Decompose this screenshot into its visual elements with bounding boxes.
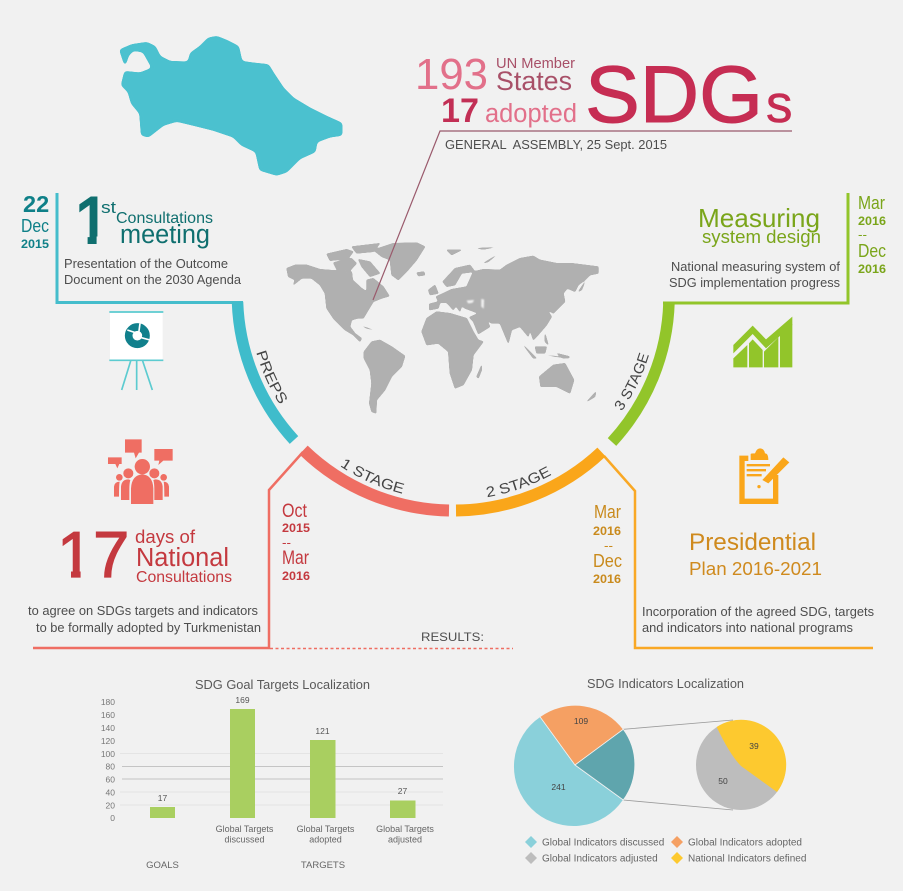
stage 3 date: Mar xyxy=(858,193,885,213)
panel: stage 1 national consultations xyxy=(28,439,450,650)
stage 1 description xyxy=(28,604,261,635)
heading: SDGs adopted: adopted xyxy=(485,100,577,128)
panel: stage 2 presidential plan xyxy=(456,448,874,650)
main pie xyxy=(514,705,635,826)
pie legend: Global Indicators adopted xyxy=(688,838,802,848)
pie value labels: 50 xyxy=(718,776,728,786)
stage 3 connector xyxy=(663,193,848,303)
stage 1 heading: National xyxy=(136,544,229,572)
stage 3 heading xyxy=(698,203,821,247)
stage 2 label: 2 STAGE xyxy=(486,466,552,498)
preps date: 22 xyxy=(23,191,49,217)
y axis labels: 180 xyxy=(101,697,115,707)
pie chart title: SDG Indicators Localization xyxy=(587,677,744,691)
stage 1 date: -- xyxy=(282,535,291,550)
preps heading: meeting xyxy=(120,221,210,249)
y axis labels: 140 xyxy=(101,723,115,733)
stage 1 heading xyxy=(57,518,232,591)
stage 2 date: Dec xyxy=(593,551,622,571)
y axis labels: 40 xyxy=(106,788,115,798)
preps arc xyxy=(238,302,294,440)
y axis labels: 160 xyxy=(101,710,115,720)
text: general assembly date: GENERAL ASSEMBLY, 25 Sept. 2015 xyxy=(445,138,667,152)
stage 1 date xyxy=(282,501,310,583)
pie value labels: 39 xyxy=(749,741,759,751)
stage 1 date: 2015 xyxy=(282,521,310,535)
stage 2 date xyxy=(593,502,622,586)
stage 1 description: to agree on SDGs targets and indicators xyxy=(28,604,258,618)
stage 3 date: 2016 xyxy=(858,214,886,228)
preps description: Presentation of the Outcome xyxy=(64,257,228,271)
bar value labels: 169 xyxy=(235,695,250,705)
bar category labels: Global Targets xyxy=(216,824,274,834)
preps heading: st xyxy=(101,198,116,217)
stage 2 arc xyxy=(456,452,602,510)
preps heading xyxy=(70,183,213,257)
preps connector xyxy=(57,193,243,302)
heading: SDGs adopted: s xyxy=(766,75,792,134)
breakout pie xyxy=(696,720,786,810)
bar category labels: adopted xyxy=(309,834,342,844)
pie value labels: 109 xyxy=(574,716,588,726)
heading: SDGs adopted: SDG xyxy=(585,50,763,140)
stage 3 date: Dec xyxy=(858,241,886,261)
y axis labels: 100 xyxy=(101,749,115,759)
bar category labels: discussed xyxy=(224,834,265,844)
pie legend: National Indicators defined xyxy=(688,854,806,864)
bars xyxy=(150,709,416,818)
bar value labels xyxy=(158,695,407,803)
stage 1 date: 2016 xyxy=(282,569,310,583)
heading: SDGs adopted xyxy=(415,50,792,140)
preps date xyxy=(21,191,49,251)
stage 2 description: and indicators into national programs xyxy=(642,621,853,635)
icon: growth chart xyxy=(733,317,792,367)
preps heading: 1 xyxy=(74,183,111,257)
bar value labels: 17 xyxy=(158,793,167,803)
icon: people talking xyxy=(108,439,173,504)
preps date: Dec xyxy=(21,216,49,236)
stage 1 heading: 17 xyxy=(57,518,129,591)
icon: clipboard and pencil xyxy=(742,448,789,501)
stage 2 description: Incorporation of the agreed SDG, targets xyxy=(642,605,874,619)
stage 1 connector xyxy=(33,452,303,648)
y axis labels: 60 xyxy=(106,774,115,784)
stage 2 description xyxy=(642,605,874,635)
stage 2 heading xyxy=(689,529,822,579)
bar chart title: SDG Goal Targets Localization xyxy=(195,677,370,692)
preps description xyxy=(64,257,241,287)
pie legend: Global Indicators discussed xyxy=(542,838,664,848)
bar value labels: 121 xyxy=(315,726,330,736)
results divider xyxy=(270,648,513,650)
preps heading: Consultations xyxy=(116,210,213,227)
bar category labels xyxy=(216,824,434,844)
stage 2 heading: Presidential xyxy=(689,529,816,556)
stage 3 label: 3 STAGE xyxy=(614,352,649,410)
stage 2 connector xyxy=(604,456,873,648)
stage 3 date: -- xyxy=(858,227,867,242)
stage 3 description: National measuring system of xyxy=(671,260,841,274)
stage 2 date: Mar xyxy=(594,502,621,522)
heading: SDGs adopted: 17 xyxy=(441,92,479,130)
stage 1 label: 1 STAGE xyxy=(340,460,404,494)
pie legend: Global Indicators adjusted xyxy=(542,854,658,864)
stage 1 arc xyxy=(304,450,449,510)
pie value labels xyxy=(551,716,759,792)
stage 2 date: 2016 xyxy=(593,524,621,538)
y axis labels: 120 xyxy=(101,736,115,746)
pie value labels: 241 xyxy=(551,782,566,792)
icon: presentation easel xyxy=(109,312,163,390)
stage 3 heading: Measuring xyxy=(698,203,820,233)
bar chart: SDG goal targets localization xyxy=(101,677,443,871)
stage 3 heading: system design xyxy=(702,226,821,247)
y axis labels: 80 xyxy=(106,762,115,772)
bar category labels: Global Targets xyxy=(376,824,434,834)
heading: SDGs adopted: 193 xyxy=(415,50,488,99)
stage 2 date: 2016 xyxy=(593,572,621,586)
stage 2 date: -- xyxy=(604,538,613,553)
stage 2 heading: Plan 2016-2021 xyxy=(689,558,822,579)
heading: SDGs adopted: UN Member xyxy=(496,56,575,72)
panel: preps xyxy=(21,183,298,444)
stage 1 heading: days of xyxy=(135,526,196,547)
stage 1 date: Mar xyxy=(282,548,310,569)
map: Turkmenistan xyxy=(120,37,342,175)
stage 3 arc xyxy=(612,302,669,442)
preps date: 2015 xyxy=(21,237,49,251)
stage 3 date: 2016 xyxy=(858,262,886,276)
pie legend xyxy=(525,836,806,864)
panel: stage 3 measuring xyxy=(608,193,886,446)
stage 3 description: SDG implementation progress xyxy=(669,276,840,290)
bar group labels: TARGETS xyxy=(301,860,345,871)
pie chart: SDG indicators localization xyxy=(514,677,806,864)
bar group labels xyxy=(146,860,345,871)
bar value labels: 27 xyxy=(398,786,407,796)
preps description: Document on the 2030 Agenda xyxy=(64,273,241,287)
y axis labels xyxy=(101,697,115,823)
heading: SDGs adopted: States xyxy=(496,66,572,96)
connector: general assembly line xyxy=(373,131,792,300)
y axis labels: 20 xyxy=(106,800,115,810)
bar category labels: adjusted xyxy=(388,834,422,844)
y axis labels: 0 xyxy=(110,813,115,823)
bar category labels: Global Targets xyxy=(297,824,355,834)
preps label: PREPS xyxy=(256,350,287,404)
stage 1 heading: Consultations xyxy=(136,569,232,586)
stage 3 description xyxy=(669,260,841,290)
stage 1 date: Oct xyxy=(282,501,308,522)
stage 1 description: to be formally adopted by Turkmenistan xyxy=(36,621,261,635)
bar group labels: GOALS xyxy=(146,860,179,871)
text: results: RESULTS: xyxy=(421,630,484,644)
map: world xyxy=(287,243,598,413)
stage 3 date xyxy=(858,193,886,276)
